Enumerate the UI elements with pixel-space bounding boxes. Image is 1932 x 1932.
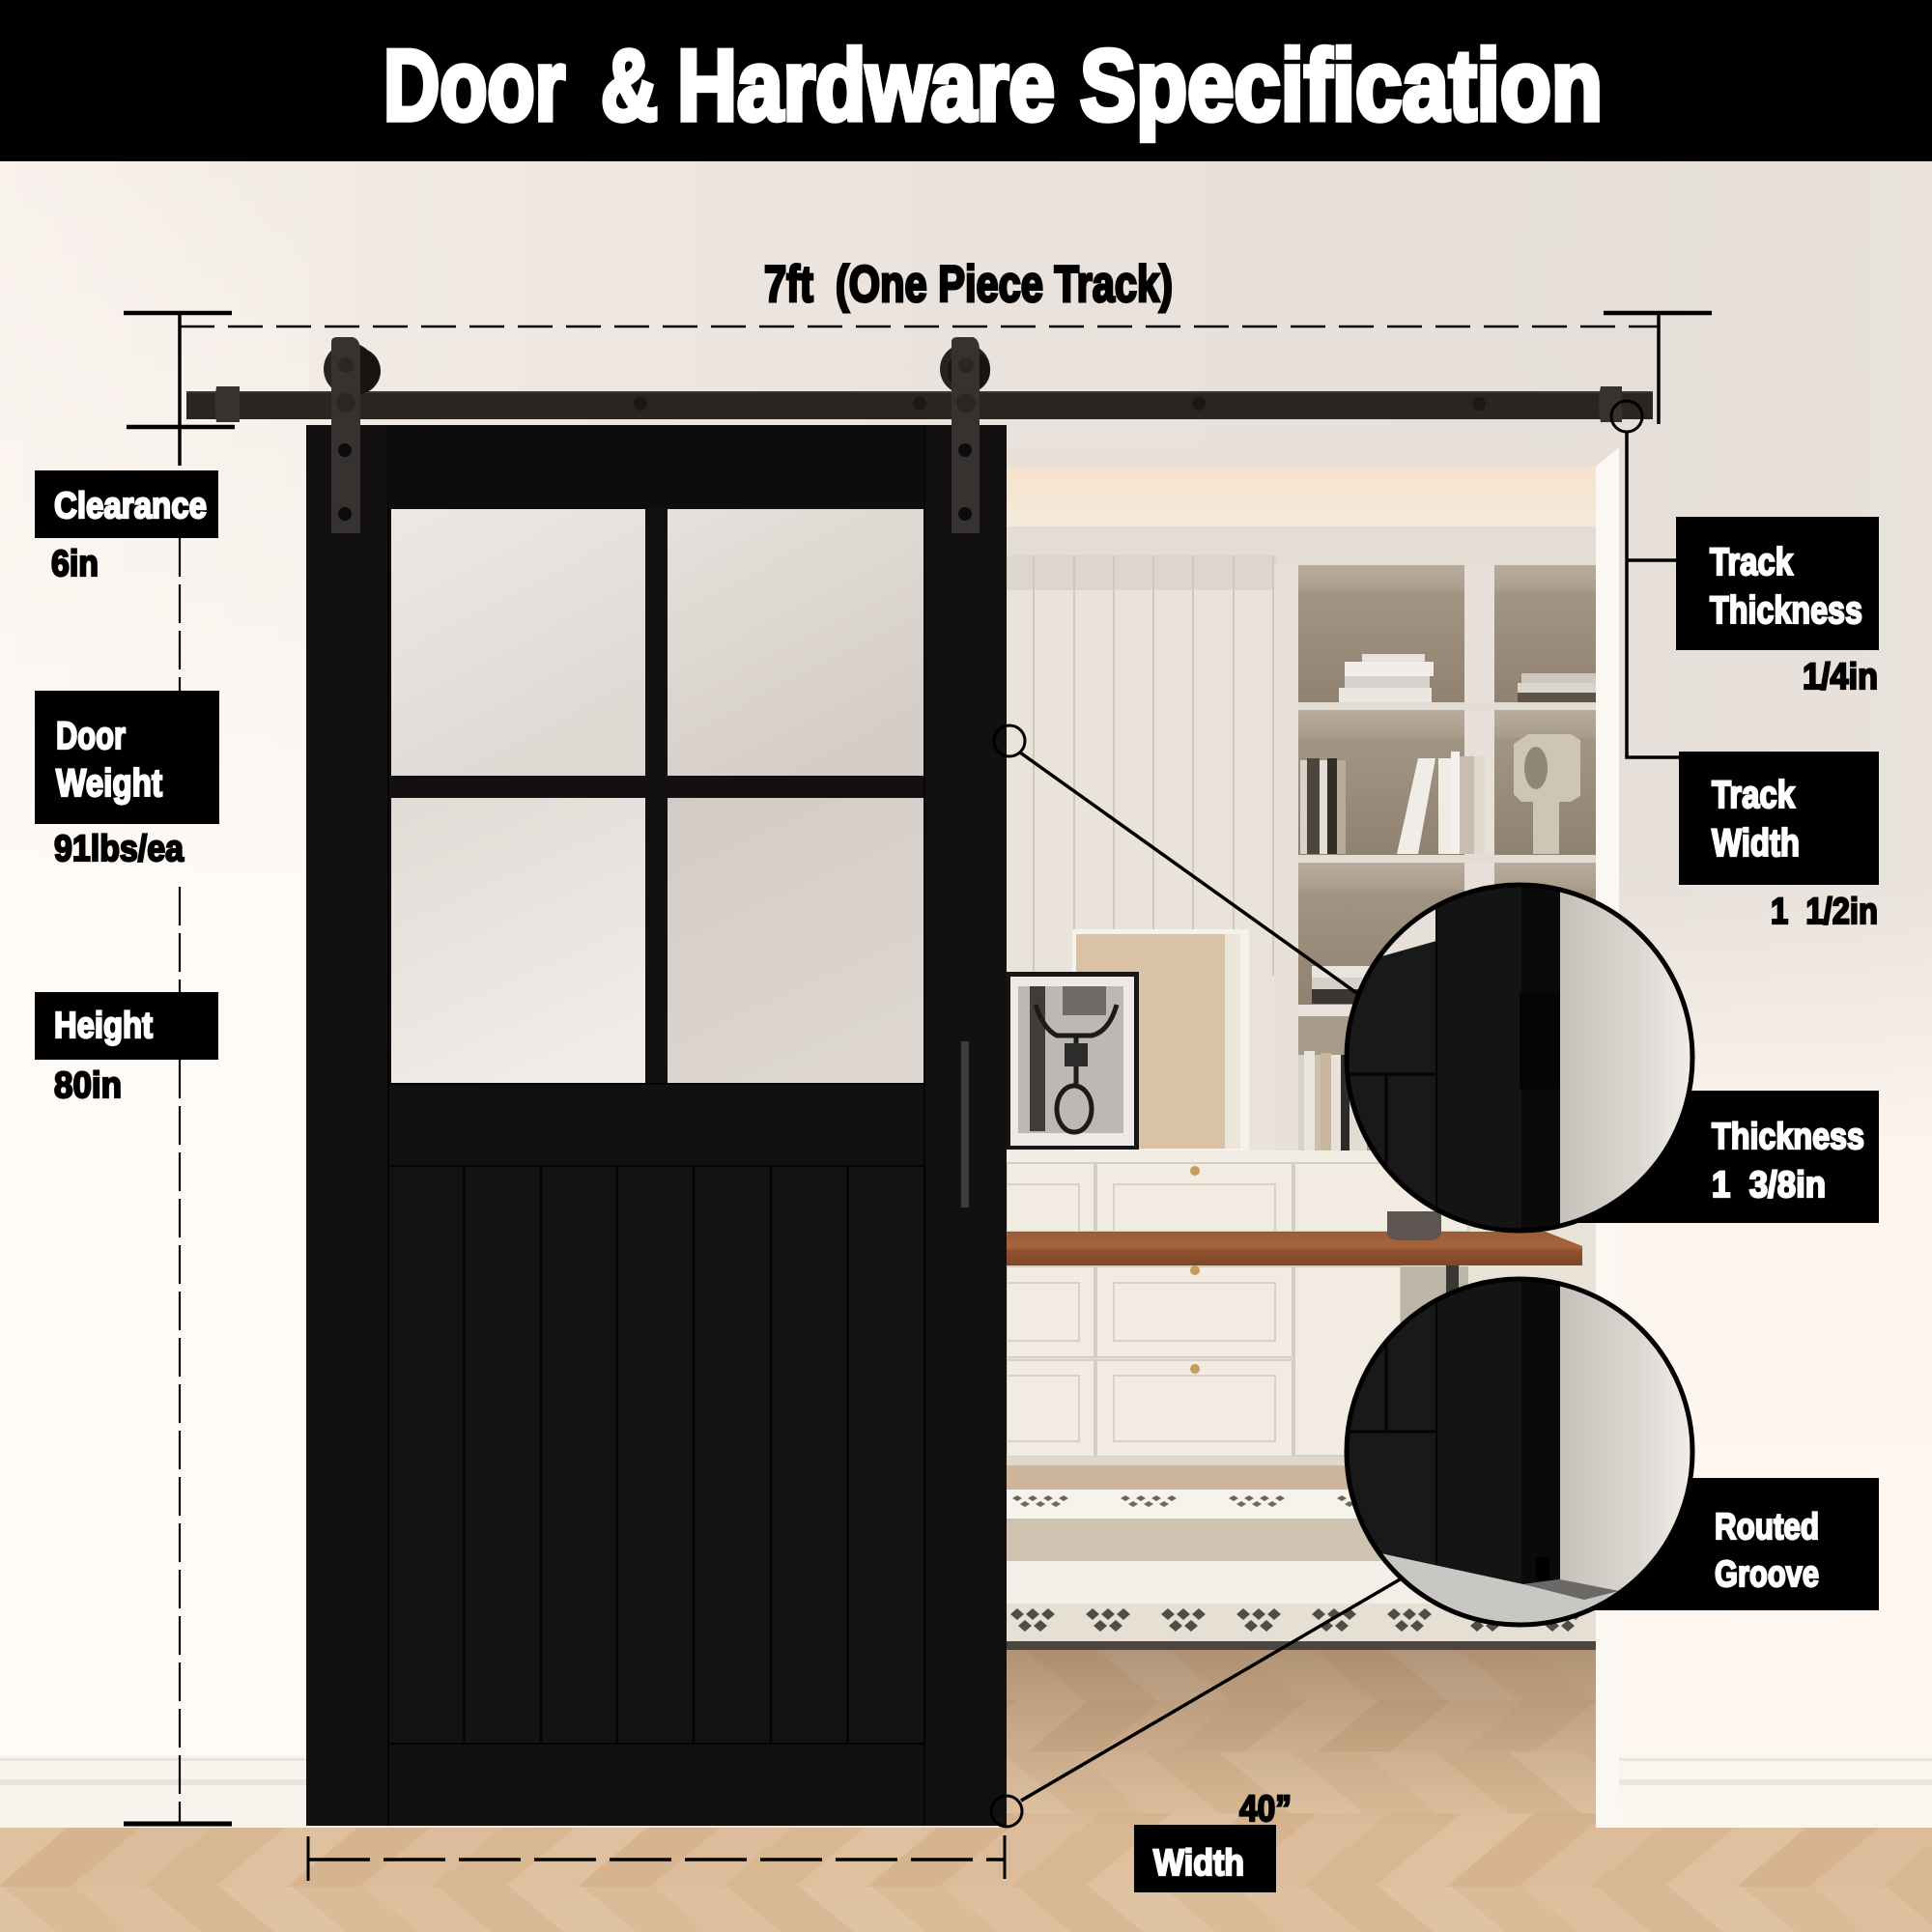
label: track thickness: 1/4in bbox=[1803, 657, 1878, 697]
wooden table bbox=[1007, 1232, 1582, 1265]
wood floor bbox=[0, 1650, 1932, 1932]
label: door weight bbox=[35, 691, 219, 869]
label: door weight: Door bbox=[56, 715, 126, 757]
title: Hardware bbox=[677, 30, 1055, 142]
bookcase bbox=[1274, 565, 1596, 1164]
door planks bbox=[388, 425, 924, 1826]
paneled wall bbox=[1007, 555, 1287, 1183]
title: Door bbox=[384, 30, 565, 142]
label: routed groove: Routed bbox=[1715, 1507, 1819, 1548]
label: door thickness: Thickness bbox=[1712, 1117, 1864, 1157]
heading bar bbox=[0, 0, 1932, 161]
shelf books bbox=[1298, 654, 1596, 1151]
track length label: 7ft (One Piece Track) bbox=[764, 256, 1173, 313]
title bbox=[384, 30, 1603, 142]
width dimension line bbox=[308, 1835, 1005, 1881]
label: door weight: Weight bbox=[56, 762, 162, 805]
framed art bbox=[1072, 929, 1249, 1151]
label: routed groove: Groove bbox=[1715, 1554, 1819, 1595]
thickness callout marker and leader bbox=[994, 725, 1362, 997]
label: height: 80in bbox=[54, 1065, 122, 1106]
door handle bbox=[961, 1041, 969, 1208]
cup bbox=[1387, 1211, 1441, 1240]
label: track thickness: Track bbox=[1710, 541, 1794, 583]
label: width bbox=[1134, 1789, 1292, 1892]
label: track thickness: Thickness bbox=[1710, 589, 1862, 632]
track length dimension line bbox=[124, 313, 1712, 424]
routed groove callout marker and leader bbox=[991, 1576, 1406, 1827]
title: & bbox=[601, 30, 658, 142]
label: door weight: 91lbs/ea bbox=[54, 829, 185, 869]
label: track width bbox=[1679, 752, 1879, 932]
label: clearance bbox=[35, 470, 218, 584]
label: track width: Width bbox=[1712, 822, 1800, 865]
title: Specification bbox=[1080, 30, 1603, 142]
label: height bbox=[35, 992, 218, 1106]
label: clearance: Clearance bbox=[54, 486, 207, 526]
label: track thickness bbox=[1676, 517, 1879, 697]
label: clearance: 6in bbox=[51, 544, 99, 584]
clearance and height dimension line bbox=[124, 313, 235, 1824]
label: door thickness: 1 3/8in bbox=[1712, 1165, 1826, 1206]
label: track width: 1 1/2in bbox=[1771, 892, 1878, 932]
right hanger bbox=[940, 337, 990, 533]
track callout lines bbox=[1611, 401, 1679, 757]
label: width: 40” bbox=[1239, 1789, 1292, 1830]
barn door bbox=[306, 425, 1007, 1826]
interior floor and rug bbox=[1007, 1457, 1596, 1650]
label: height: Height bbox=[54, 1006, 153, 1046]
counter and cabinets bbox=[1007, 1151, 1596, 1466]
label: routed groove bbox=[1546, 1478, 1879, 1610]
framed bicycle photo bbox=[1007, 972, 1139, 1150]
detail lens: door thickness bbox=[1343, 879, 1700, 1236]
door glass panes bbox=[391, 509, 923, 1084]
track stops bbox=[214, 386, 1622, 422]
left hanger bbox=[324, 337, 381, 533]
label: door thickness bbox=[1546, 1091, 1879, 1223]
door trim bbox=[1007, 447, 1625, 1828]
crown molding bbox=[1007, 526, 1596, 565]
label: track width: Track bbox=[1712, 774, 1796, 816]
baseboards bbox=[0, 1755, 1932, 1828]
room interior seen through opening bbox=[1007, 447, 1596, 1650]
barn door track bbox=[186, 391, 1653, 419]
label: width: Width bbox=[1153, 1843, 1244, 1884]
detail lens: routed groove bbox=[1343, 1275, 1700, 1633]
